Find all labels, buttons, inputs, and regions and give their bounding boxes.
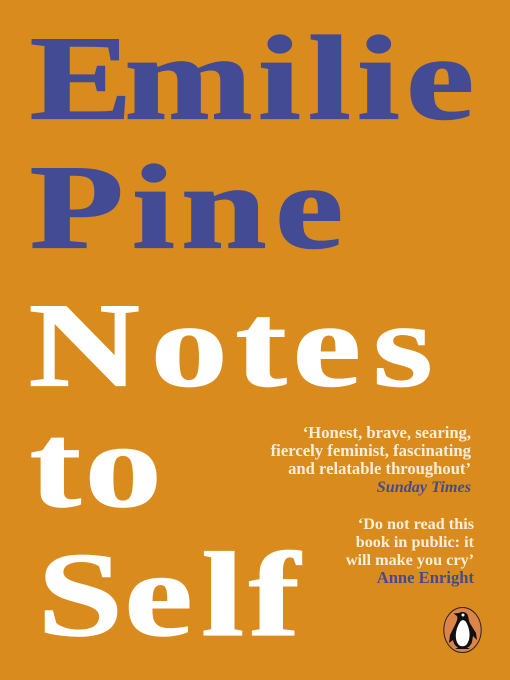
quote: Anne Enright: ‘Do not read this xyxy=(358,515,474,533)
author name xyxy=(30,11,474,274)
quote: Sunday Times xyxy=(271,423,472,496)
book title xyxy=(29,278,433,661)
author name: Pine xyxy=(30,140,343,274)
quote: Anne Enright xyxy=(346,515,475,587)
quote: Sunday Times: and relatable throughout’ xyxy=(288,459,471,478)
quote: Anne Enright: will make you cry’ xyxy=(346,551,474,569)
book title: Self xyxy=(37,528,302,661)
author name: Emilie xyxy=(30,11,474,145)
quote: Anne Enright: Anne Enright xyxy=(377,568,474,587)
quote: Sunday Times: Sunday Times xyxy=(377,478,471,496)
quote: Sunday Times: ‘Honest, brave, searing, xyxy=(303,423,471,442)
book title: Notes xyxy=(29,278,433,412)
quote: Sunday Times: fiercely feminist, fascinating xyxy=(271,441,472,460)
quote: Anne Enright: book in public: it xyxy=(356,533,475,551)
book title: to xyxy=(30,399,162,532)
icon: penguin logo xyxy=(444,608,481,652)
